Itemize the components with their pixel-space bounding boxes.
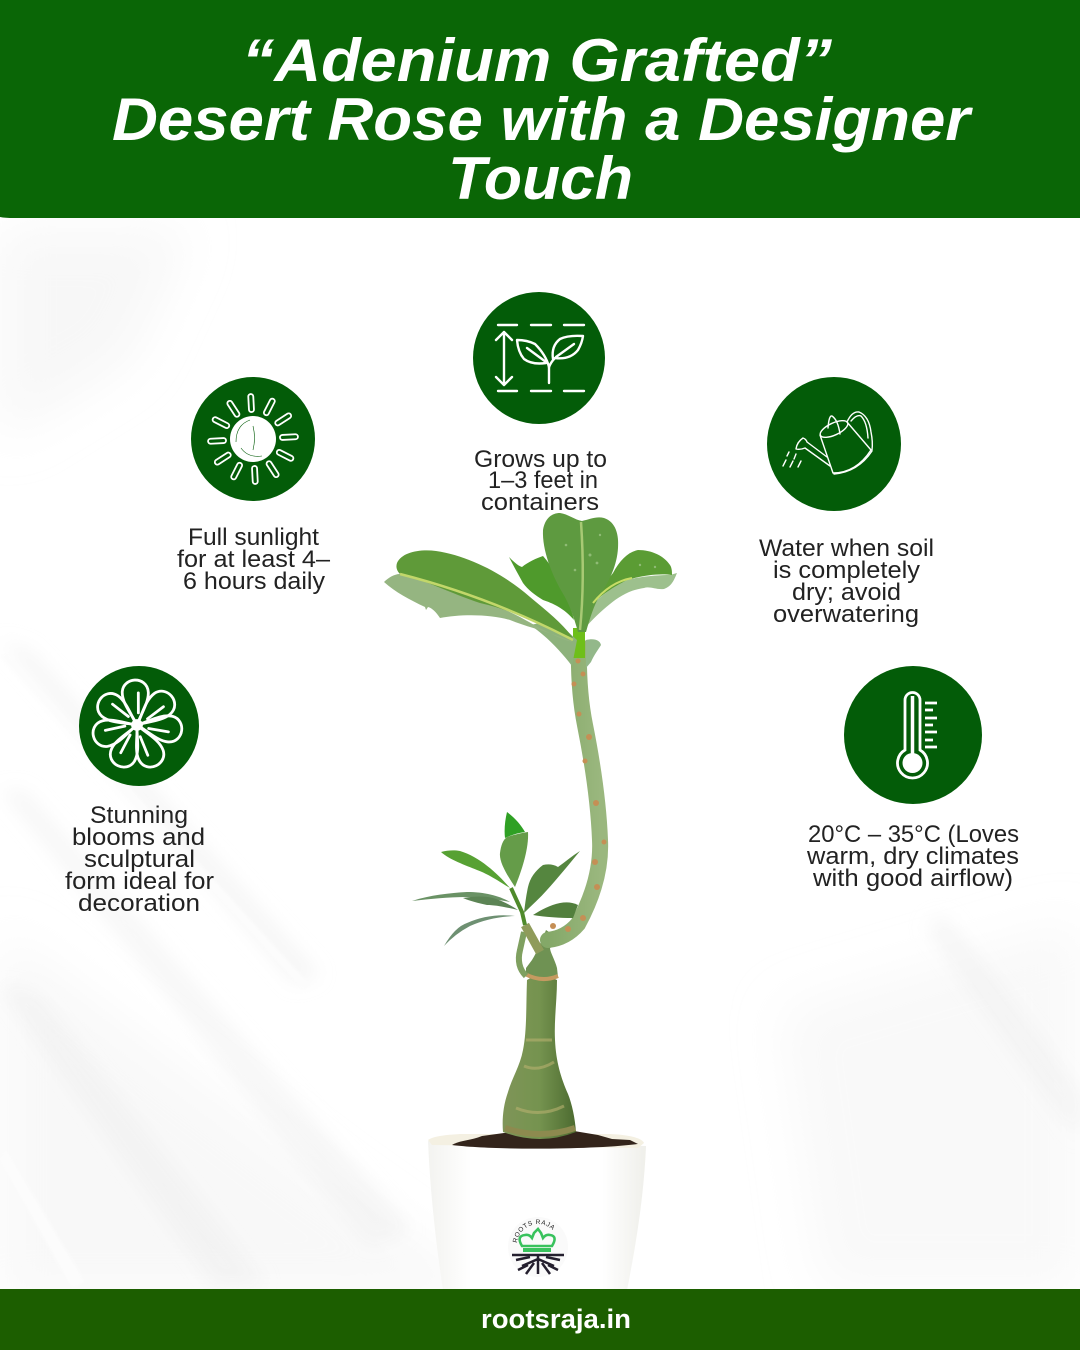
icon: flower	[79, 666, 199, 786]
text: sunlight: Full sunlight	[188, 524, 319, 551]
text: blooms: form ideal for	[65, 868, 214, 895]
text: height: containers	[481, 489, 599, 516]
footer bar	[0, 1289, 1080, 1350]
pot	[428, 1131, 646, 1290]
text: blooms: decoration	[78, 890, 200, 917]
text: watering: is completely	[773, 557, 920, 584]
text: watering: Water when soil	[759, 535, 934, 562]
text: height	[474, 446, 607, 516]
feature: blooms	[65, 666, 214, 917]
title: Touch	[448, 145, 633, 212]
text: blooms: sculptural	[84, 846, 195, 873]
feature: temperature	[806, 666, 1019, 892]
text: temperature: with good airflow)	[812, 865, 1013, 892]
icon: sun	[191, 377, 315, 501]
icon: thermometer	[844, 666, 982, 804]
trunk	[503, 925, 576, 1139]
text: blooms: Stunning	[90, 802, 188, 829]
text: watering: dry; avoid	[792, 579, 901, 606]
text: temperature	[806, 821, 1019, 892]
text: sunlight: for at least 4–	[177, 546, 331, 573]
title: Desert Rose with a Designer	[112, 86, 974, 153]
text: blooms: blooms and	[72, 824, 205, 851]
feature: watering	[759, 377, 934, 628]
pot logo badge	[512, 1220, 564, 1275]
text: temperature: warm, dry climates	[806, 843, 1019, 870]
text: blooms	[65, 802, 214, 917]
text: watering: overwatering	[773, 601, 919, 628]
top leaves	[384, 513, 677, 668]
text: temperature: 20°C – 35°C (Loves	[808, 821, 1019, 848]
text: height: Grows up to	[474, 446, 607, 473]
title: “Adenium Grafted”	[242, 27, 832, 94]
text: watering	[759, 535, 934, 628]
footer url: rootsraja.in	[481, 1304, 631, 1334]
header banner	[0, 0, 1080, 218]
main stem	[548, 628, 606, 940]
small side leaves	[412, 812, 580, 946]
text: height: 1–3 feet in	[488, 467, 598, 494]
pot logo badge: ROOTS RAJA	[512, 1220, 554, 1242]
plant in pot	[384, 513, 677, 1289]
feature: sunlight	[177, 377, 331, 595]
feature: height	[473, 292, 607, 516]
icon: plant height	[473, 292, 605, 424]
text: sunlight	[177, 524, 331, 595]
text: sunlight: 6 hours daily	[183, 568, 325, 595]
icon: watering can	[767, 377, 901, 511]
title	[112, 27, 974, 212]
